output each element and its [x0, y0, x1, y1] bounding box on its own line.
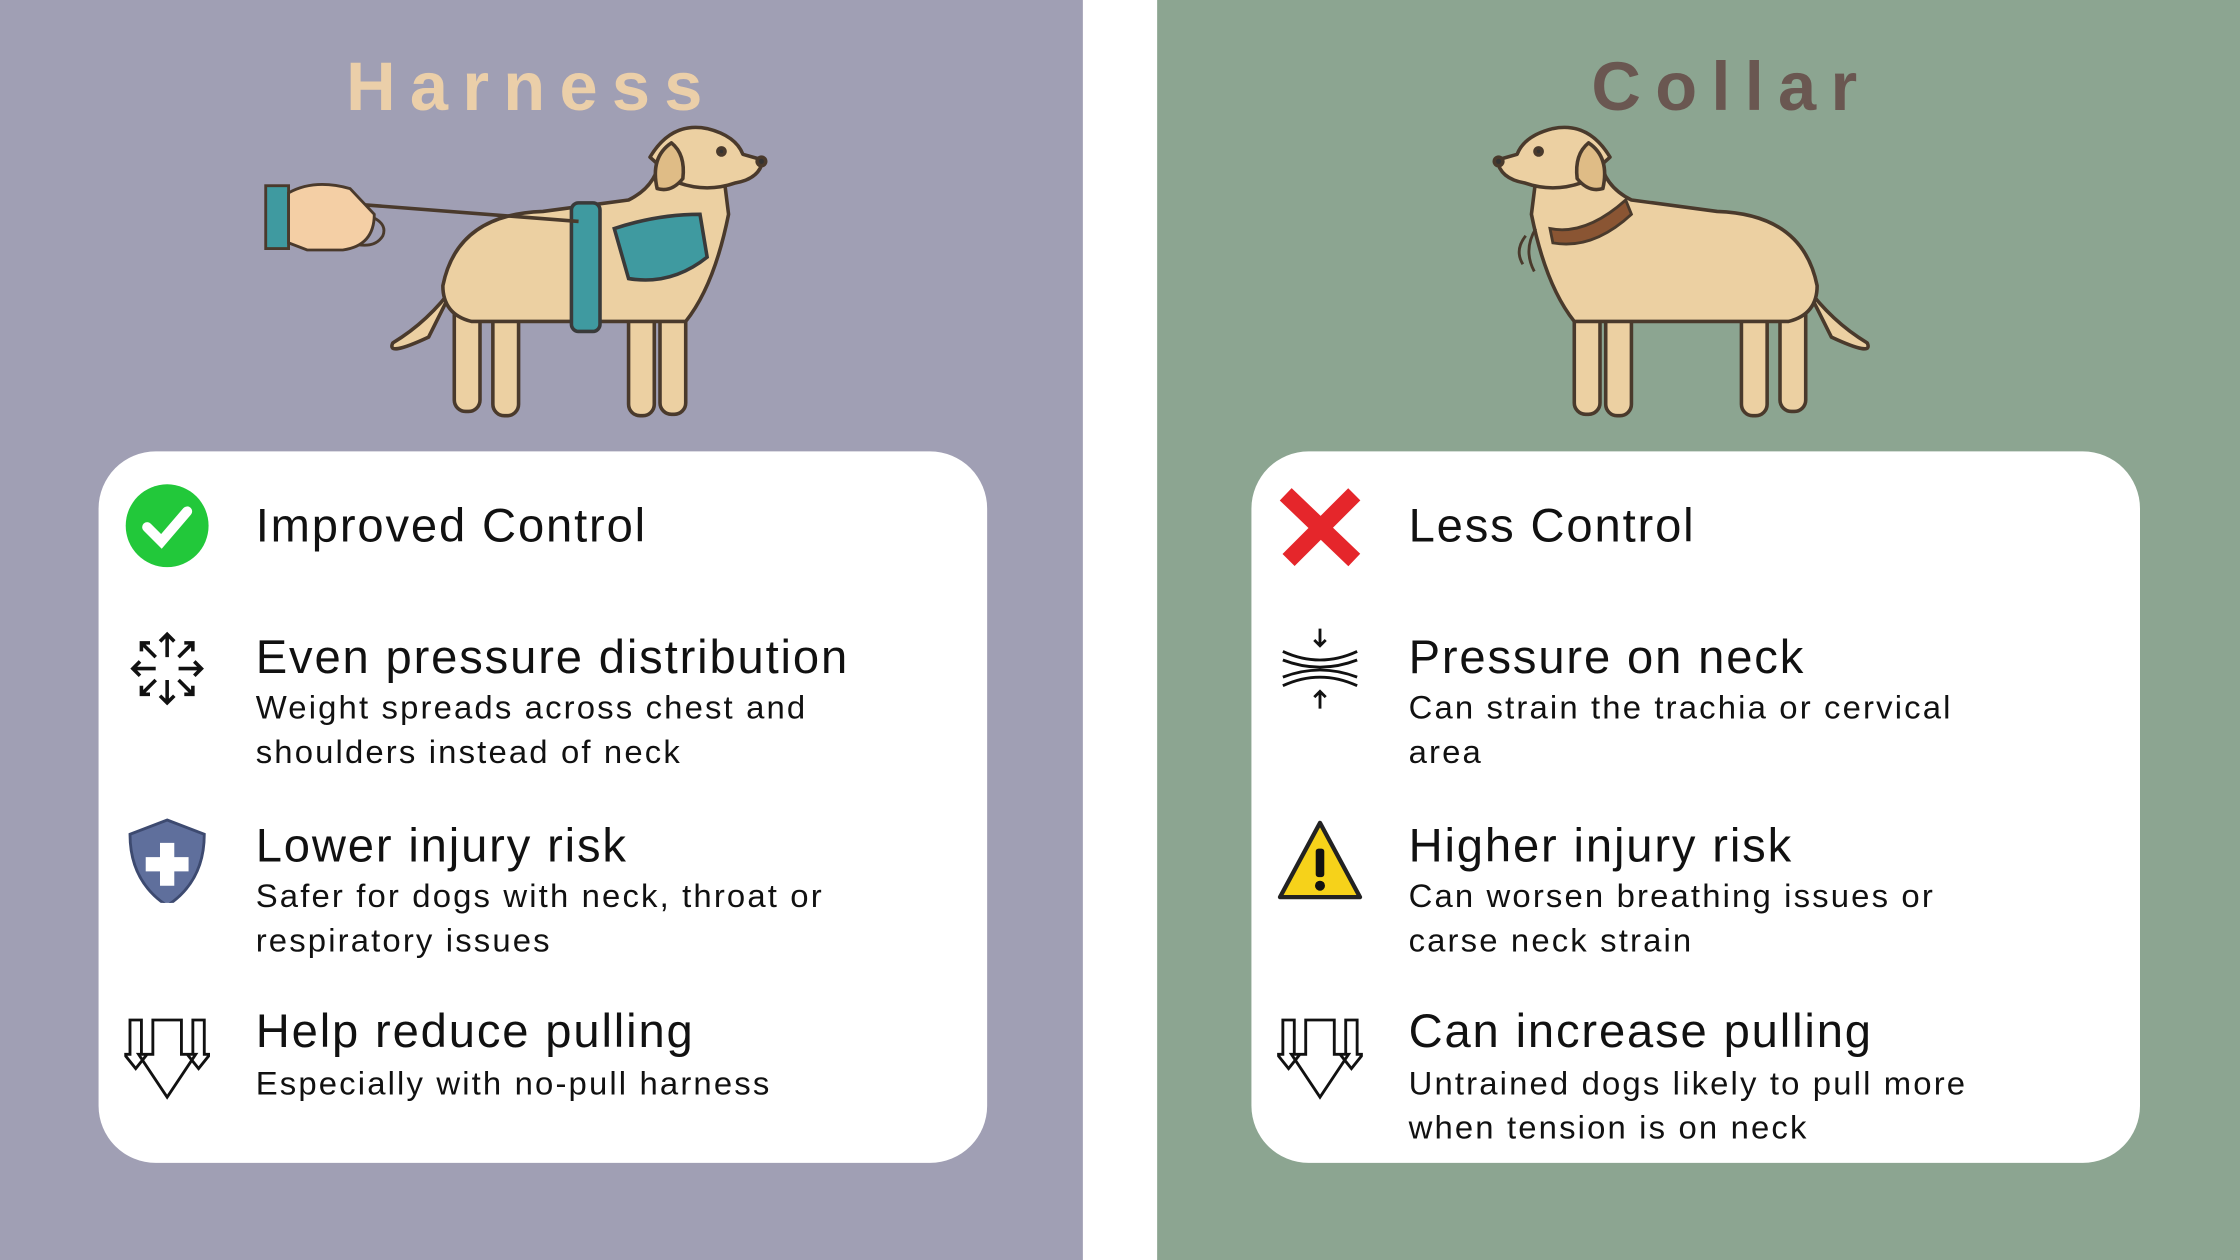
- collar: [1550, 200, 1631, 244]
- heading: improved control: Improved Control: [256, 499, 647, 551]
- panel: harness card: [99, 451, 987, 1163]
- illustration: dogs: [264, 126, 1870, 418]
- heading: less control: Less Control: [1409, 499, 1696, 551]
- panel: collar card: [1251, 451, 2140, 1163]
- title: Collar: Collar: [1591, 50, 1871, 126]
- panel: harness card: Safer for dogs with neck, throat or: [256, 877, 824, 914]
- text: higher injury: Higher injury risk: [1409, 819, 1793, 871]
- text: reduce pulling: Help reduce pulling: [256, 1004, 695, 1057]
- icon: down arrows: [124, 1018, 210, 1100]
- icon: shield: [128, 818, 206, 903]
- panel: collar card: area: [1409, 733, 1483, 770]
- icon: down arrows: [1277, 1018, 1363, 1100]
- panel: collar card: Can worsen breathing issues or: [1409, 877, 1935, 914]
- icon: neck pressure: [1282, 628, 1358, 709]
- icon: pressure arrows: [130, 632, 204, 706]
- panel: harness card: Especially with no-pull harness: [256, 1064, 771, 1101]
- panel: harness background: [0, 0, 1083, 1260]
- icon: warning: [1278, 820, 1362, 900]
- text: even pressure: Even pressure distribution: [256, 630, 849, 683]
- panel: collar card: when tension is on neck: [1409, 1109, 1809, 1146]
- harness straps: [614, 214, 707, 280]
- panel: harness card: Weight spreads across chest and: [256, 689, 807, 726]
- panel: collar background: [1157, 0, 2240, 1260]
- panel: harness card: respiratory issues: [256, 921, 552, 959]
- text: pressure on neck: Pressure on neck: [1409, 630, 1805, 683]
- panel: collar card: Untrained dogs likely to pull more: [1409, 1064, 1967, 1101]
- panel: collar card: Can strain the trachia or cervical: [1409, 689, 1953, 726]
- text: lower injury: Lower injury risk: [256, 819, 628, 871]
- icon: green check: [126, 484, 209, 568]
- panel: harness card: shoulders instead of neck: [256, 733, 682, 770]
- leash + hand: [357, 204, 579, 221]
- text: increase pulling: Can increase pulling: [1409, 1004, 1873, 1057]
- panel: collar card: carse neck strain: [1409, 921, 1693, 959]
- title: Harness: Harness: [346, 50, 717, 126]
- icon: red X: [1280, 488, 1360, 566]
